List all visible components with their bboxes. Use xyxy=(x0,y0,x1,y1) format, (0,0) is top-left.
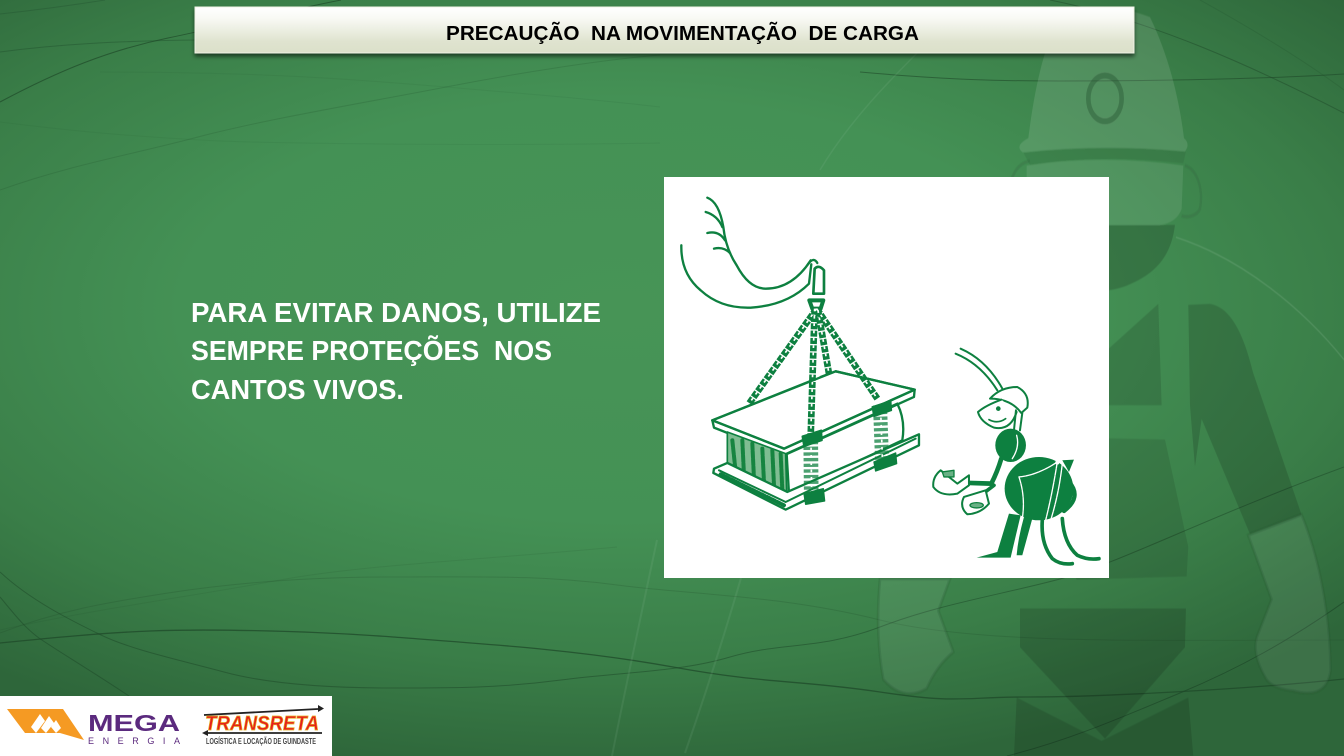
abdomen xyxy=(1005,457,1073,520)
body text: PARA EVITAR DANOS, UTILIZE xyxy=(191,297,601,328)
face xyxy=(1027,160,1183,225)
legs xyxy=(977,514,1021,558)
ant worker xyxy=(933,349,1099,564)
harness strap left xyxy=(1060,304,1162,405)
helmet xyxy=(990,387,1028,413)
antennae xyxy=(956,349,1003,390)
right glove xyxy=(1248,515,1331,693)
logo: Mega Energia: ENERGIA xyxy=(88,736,180,746)
thorax xyxy=(995,429,1026,462)
left glove xyxy=(878,579,953,694)
helmet xyxy=(1019,8,1188,152)
arm xyxy=(969,459,1001,484)
wrap chains xyxy=(802,401,897,504)
background worker silhouette xyxy=(878,8,1344,756)
logo strip xyxy=(0,696,332,756)
logo: Mega Energia: MEGA xyxy=(88,710,180,736)
title bar xyxy=(195,7,1134,53)
harness strap right xyxy=(1188,304,1302,534)
head xyxy=(978,400,1017,428)
body text xyxy=(191,297,601,405)
face band xyxy=(1023,147,1186,166)
crane hook rope xyxy=(681,198,824,309)
shoulder outline xyxy=(1176,237,1344,360)
steel beam xyxy=(712,371,919,510)
gloves xyxy=(933,470,969,494)
body text: SEMPRE PROTEÇÕES NOS xyxy=(191,335,552,366)
helmet lamp xyxy=(1088,76,1122,121)
legs xyxy=(1014,698,1193,756)
chains xyxy=(749,309,877,437)
title: PRECAUÇÃO NA MOVIMENTAÇÃO DE CARGA xyxy=(446,22,919,45)
beard xyxy=(1050,225,1175,291)
logo: Mega Energia xyxy=(7,709,180,746)
logo: Transreta xyxy=(202,705,324,746)
torso panel xyxy=(1057,437,1188,580)
body text: CANTOS VIVOS. xyxy=(191,374,404,405)
illustration panel xyxy=(664,177,1109,578)
logo: Transreta: LOGÍSTICA E LOCAÇÃO DE GUINDASTE xyxy=(206,737,316,746)
belt buckle shape xyxy=(1020,608,1186,739)
logo: Transreta: TRANSRETA xyxy=(205,713,319,735)
ear muffs xyxy=(1008,161,1201,217)
